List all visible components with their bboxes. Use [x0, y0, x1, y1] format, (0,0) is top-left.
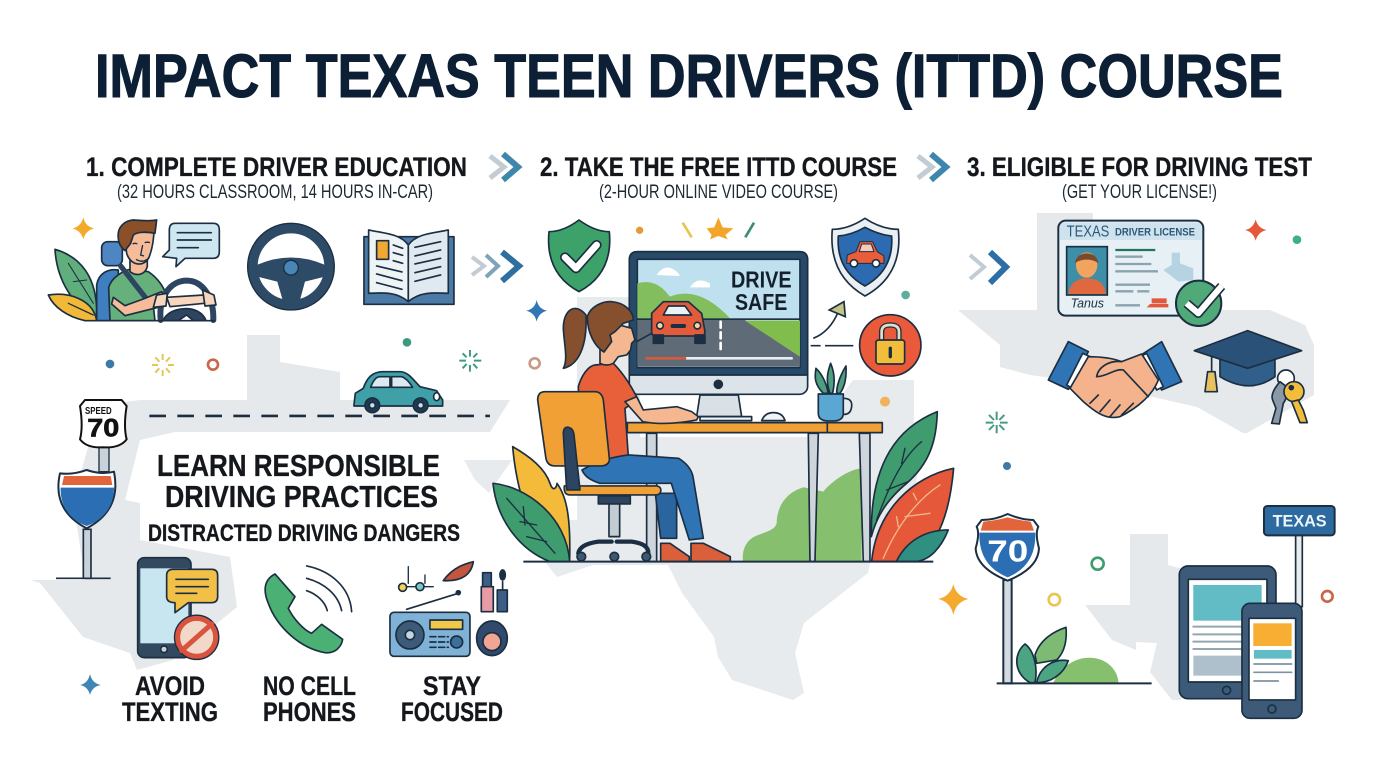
icon: arrow up-right [811, 302, 853, 346]
arrow: chevrons before computer [472, 252, 519, 281]
icon: driver license card [1058, 221, 1222, 326]
icon: sparkle and dots [986, 219, 1301, 433]
learn heading: LEARN RESPONSIBLE [157, 448, 440, 483]
heading: step 2: 2. TAKE THE FREE ITTD COURSE [540, 152, 897, 182]
icon: speed 70 sign: 70 [87, 416, 119, 443]
icon: driver license card: Tanus [1071, 295, 1104, 310]
heading: step 1: 1. COMPLETE DRIVER EDUCATION [86, 152, 467, 182]
arrow: chevrons before license [970, 252, 1006, 283]
icon: steering wheel [248, 223, 334, 310]
right illustrations [986, 219, 1307, 433]
icon: sparkle [72, 217, 94, 239]
icon: driver license card: DRIVER LICENSE [1115, 227, 1195, 239]
labels: PHONES [263, 697, 356, 727]
icon: keys [1272, 370, 1307, 424]
arrow: heading chevrons 1 to 2 [490, 154, 518, 180]
icon: speech bubble [163, 223, 219, 267]
icon: sparkle [80, 674, 101, 695]
icon: tablet [1179, 566, 1276, 699]
decorative dot mid right [1003, 462, 1011, 470]
floor line [523, 559, 933, 565]
icon: Texas sign [1264, 506, 1335, 607]
icon: woman at computer [493, 302, 730, 562]
icon: interstate sign [56, 470, 115, 578]
icon: green check shield [549, 220, 610, 292]
heading: step 1 [86, 152, 467, 203]
icon: green leaves and bush [1017, 627, 1118, 683]
background: Texas silhouette lower right [1085, 534, 1250, 700]
icon: graduation cap [1194, 331, 1302, 392]
icon: smartphone [1242, 603, 1302, 718]
background: Texas fragment centre left [464, 460, 512, 493]
heading: step 2 [540, 152, 897, 203]
icon: green handset with signal [265, 566, 352, 653]
icon: driver at the wheel [48, 220, 216, 321]
icon: phone texting [138, 558, 219, 659]
subheading: step 3: (GET YOUR LICENSE!) [1062, 182, 1217, 203]
subheading: distracted driving: DISTRACTED DRIVING DANGERS [148, 520, 460, 547]
icon: interstate 70 sign [976, 514, 1039, 683]
icon: sparkle and dots [526, 291, 910, 407]
icon: radio and makeup [390, 562, 507, 656]
centre illustration [493, 217, 954, 562]
icon: blue car shield [832, 218, 899, 296]
icon: decorative rings [1049, 558, 1333, 605]
road scene [80, 338, 490, 472]
background: Texas silhouette centre [545, 297, 918, 700]
icon: computer monitor: DRIVE [731, 267, 792, 293]
icon: speed 70 sign: SPEED [85, 406, 112, 417]
labels: AVOID [135, 671, 205, 701]
icon: green bush [743, 468, 862, 562]
icon: sparkle [938, 584, 968, 615]
icon: interstate 70 sign: 70 [987, 535, 1028, 569]
heading: step 3: 3. ELIGIBLE FOR DRIVING TEST [967, 152, 1312, 182]
icon: handshake [1048, 342, 1182, 418]
icon: green check badge [1176, 281, 1222, 326]
background: Texas silhouette left [30, 335, 510, 670]
icon: tropical leaves [871, 412, 954, 562]
icon: computer monitor: SAFE [735, 289, 787, 315]
labels: STAY [423, 671, 481, 701]
icon: keyboard and mouse [700, 413, 785, 421]
step 1 icons [48, 217, 454, 321]
icon: driver license card: TEXAS [1067, 224, 1109, 241]
icon: road with dashes [149, 412, 490, 420]
background: Texas silhouette right [958, 213, 1314, 433]
icon: teal car [354, 372, 443, 413]
icon: star and confetti [636, 217, 754, 239]
arrow: heading chevrons 2 to 3 [918, 154, 946, 180]
subheading: step 1: (32 HOURS CLASSROOM, 14 HOURS IN-CAR) [117, 182, 433, 203]
icon: open book [364, 230, 454, 304]
labels: FOCUSED [401, 697, 503, 727]
subheading: step 2: (2-HOUR ONLINE VIDEO COURSE) [599, 182, 838, 203]
distraction icons [56, 470, 507, 695]
desk [627, 423, 882, 562]
labels: NO CELL [263, 671, 356, 701]
heading: step 3 [967, 152, 1312, 203]
lower right [938, 506, 1335, 718]
labels: TEXTING [122, 697, 218, 727]
icon: Texas sign: TEXAS [1273, 512, 1327, 531]
labels [122, 671, 503, 727]
icon: computer monitor [629, 252, 808, 417]
learn heading [148, 448, 460, 547]
icon: speed 70 sign [80, 400, 127, 472]
icon: plant in mug [815, 363, 852, 421]
icon: padlock [860, 315, 921, 376]
learn heading: DRIVING PRACTICES [165, 479, 438, 514]
